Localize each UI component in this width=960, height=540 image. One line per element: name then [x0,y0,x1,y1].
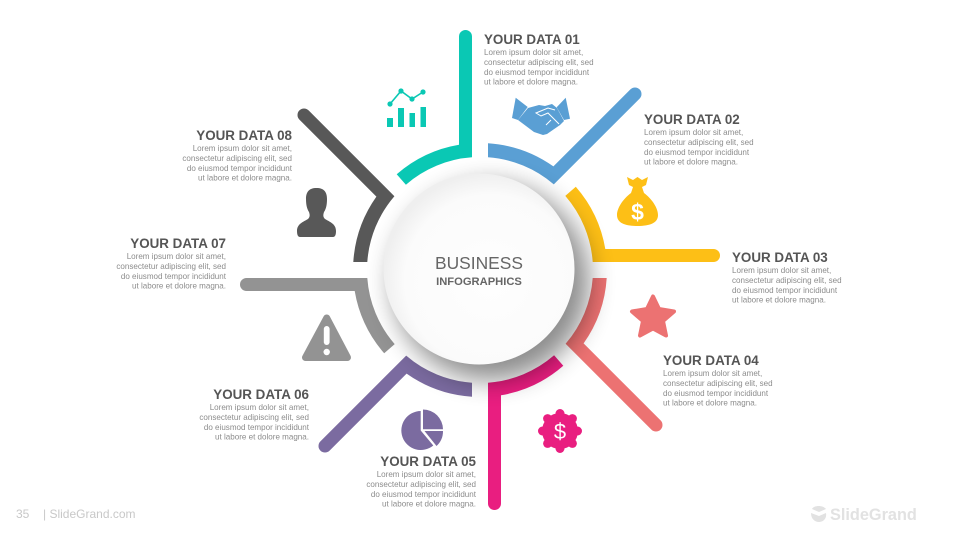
text block 01 [484,32,594,86]
icon: line and bar chart [387,88,426,127]
text block 07: do eiusmod tempor incididunt [121,272,227,281]
icon: star [632,296,674,336]
arm 01: teal [397,30,472,185]
text block 06: do eiusmod tempor incididunt [204,423,310,432]
icon: dollar gear: $ [554,419,566,444]
text block 03: ut labore et dolore magna. [732,296,826,304]
text block 06: YOUR DATA 06 [213,387,309,402]
icon: pie chart [401,410,443,450]
text block 07: consectetur adipiscing elit, sed [116,262,226,271]
text block 04: YOUR DATA 04 [663,353,759,368]
text block 08: do eiusmod tempor incididunt [187,164,293,173]
text block 01: consectetur adipiscing elit, sed [484,58,594,67]
text block 06: consectetur adipiscing elit, sed [199,413,309,422]
icon: dollar gear [538,409,582,453]
text block 08: consectetur adipiscing elit, sed [182,154,292,163]
arm 06: purple [318,356,472,453]
text block 03: Lorem ipsum dolor sit amet, [732,266,831,275]
text block 03: consectetur adipiscing elit, sed [732,276,842,285]
text block 03: do eiusmod tempor incididunt [732,286,838,295]
text block 01: ut labore et dolore magna. [484,78,578,86]
icon: handshake [512,98,570,135]
text block 02 [644,112,754,166]
arm 08: dark gray [297,108,394,262]
arm 04: coral [566,278,663,432]
text block 01: do eiusmod tempor incididunt [484,68,590,77]
text block 08: Lorem ipsum dolor sit amet, [193,144,292,153]
text block 05 [366,454,477,508]
icon: person [297,188,336,237]
text block 05: Lorem ipsum dolor sit amet, [377,470,476,479]
icon: warning triangle [306,318,348,358]
text block 07 [116,236,227,290]
text block 05: YOUR DATA 05 [380,454,477,469]
center title: BUSINESS [435,253,523,273]
text block 03: YOUR DATA 03 [732,250,828,265]
center disc [384,174,574,364]
text block 04: ut labore et dolore magna. [663,398,757,408]
text block 06: ut labore et dolore magna. [215,432,309,442]
text block 02: consectetur adipiscing elit, sed [644,138,754,147]
footer: page number: 35 [16,507,30,521]
text block 01: YOUR DATA 01 [484,32,580,47]
text block 08: YOUR DATA 08 [196,128,293,143]
text block 01: Lorem ipsum dolor sit amet, [484,48,583,57]
text block 05: do eiusmod tempor incididunt [371,490,477,499]
text block 06: Lorem ipsum dolor sit amet, [210,403,309,412]
text block 02: Lorem ipsum dolor sit amet, [644,128,743,137]
text block 05: consectetur adipiscing elit, sed [366,480,476,489]
text block 07: Lorem ipsum dolor sit amet, [127,252,226,261]
text block 03 [732,250,842,304]
arm 03: yellow [565,187,720,262]
text block 07: ut labore et dolore magna. [132,282,226,290]
text block 04 [663,353,773,408]
footer: logo: SlideGrand [830,506,917,524]
text block 08 [182,128,293,182]
text block 02: do eiusmod tempor incididunt [644,148,750,157]
footer: site name: | SlideGrand.com [43,507,136,521]
text block 05: ut labore et dolore magna. [382,500,476,508]
arm 02: blue [488,87,642,184]
icon: money bag: $ [631,199,644,225]
text block 04: do eiusmod tempor incididunt [663,389,769,398]
center disc shadow [393,184,589,380]
arm 05: pink [488,355,563,510]
text block 07: YOUR DATA 07 [130,236,226,251]
text block 04: Lorem ipsum dolor sit amet, [663,369,762,378]
text block 04: consectetur adipiscing elit, sed [663,379,773,388]
text block 06 [199,387,310,442]
text block 02: YOUR DATA 02 [644,112,740,127]
text block 02: ut labore et dolore magna. [644,158,738,166]
center subtitle: INFOGRAPHICS [436,276,522,288]
icon: money bag [617,177,658,226]
arm 07: gray [240,278,395,353]
text block 08: ut labore et dolore magna. [198,174,292,182]
